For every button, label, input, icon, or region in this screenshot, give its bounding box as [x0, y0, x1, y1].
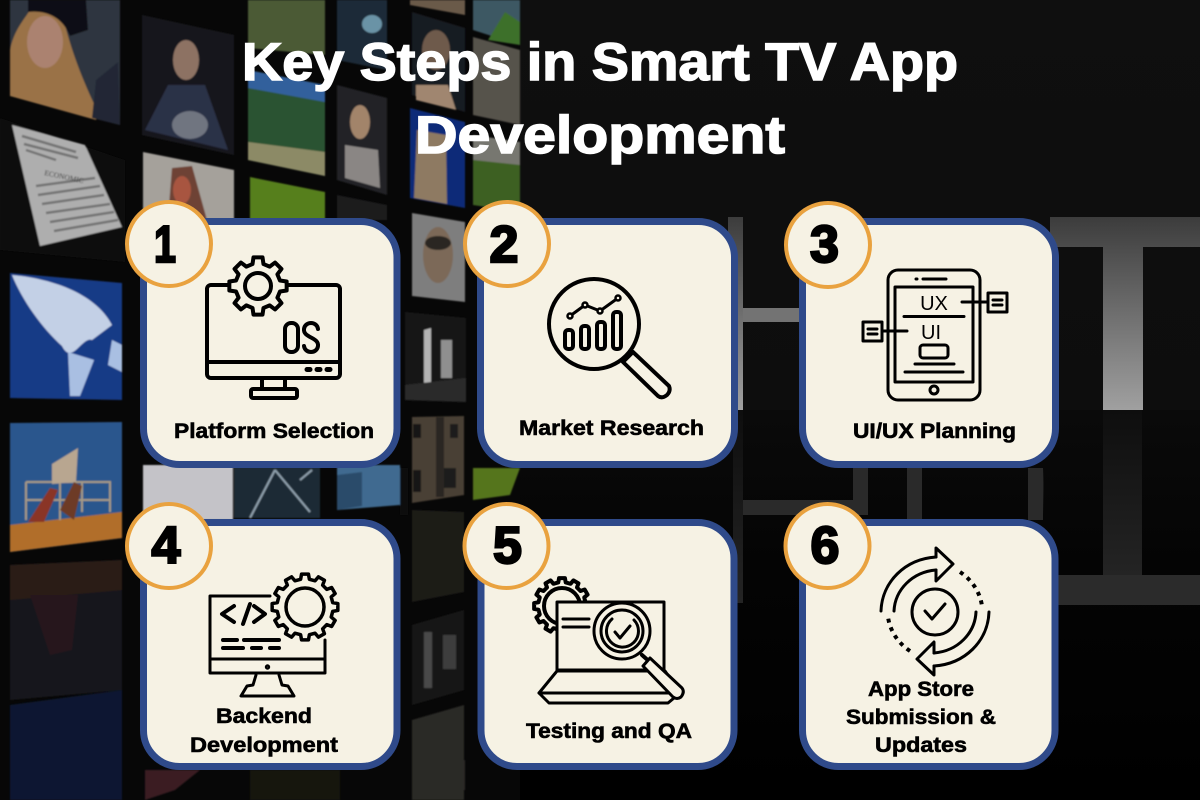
panel: step 3 ui/ux planning	[786, 203, 1056, 464]
glasses girl	[412, 213, 465, 302]
number badge 4	[127, 504, 211, 588]
icon: magnifier with bar chart	[549, 279, 670, 397]
door screen	[405, 312, 466, 402]
background: giant reflected letters	[728, 217, 1200, 605]
icon: phone wireframe	[863, 270, 1007, 400]
number badge 4: 4	[152, 517, 181, 575]
panel: step 1 platform selection	[127, 202, 397, 464]
strip bottom	[145, 770, 200, 800]
castle	[412, 416, 464, 503]
woman with hat	[10, 0, 120, 125]
world map screen	[10, 273, 122, 400]
column 6 top	[473, 0, 520, 45]
tablet page with economic text	[0, 118, 125, 262]
icon: monitor with gear and OS	[207, 257, 340, 398]
icon: laptop with magnifier and gear	[534, 578, 683, 703]
playground screen	[10, 422, 122, 552]
reflected column 5	[412, 510, 464, 602]
number badge 1: 1	[154, 216, 176, 274]
title: Key Steps in Smart TV App	[242, 33, 958, 92]
label: Platform Selection	[174, 420, 374, 443]
label: App Store	[868, 678, 974, 701]
dark screens	[337, 0, 387, 70]
number badge 6: 6	[811, 517, 839, 575]
number badge 3: 3	[810, 216, 839, 274]
panel: step 6 app store submission and updates	[786, 504, 1055, 766]
label	[190, 705, 338, 757]
number badge 1	[127, 202, 211, 286]
label: Backend	[216, 705, 312, 728]
label	[846, 678, 996, 757]
title: Development	[415, 106, 785, 165]
label: Submission &	[846, 706, 996, 729]
label: Development	[190, 734, 338, 757]
woman top column 5	[410, 0, 465, 15]
label: UI/UX Planning	[853, 420, 1016, 443]
icon: circular update arrows with check	[881, 548, 989, 675]
icon: phone wireframe: UX	[920, 293, 948, 315]
reflected screens column 1	[10, 560, 122, 700]
panel: step 2 market research	[465, 202, 734, 464]
pinup	[143, 152, 234, 220]
label: Updates	[875, 734, 967, 757]
number badge 6	[786, 504, 870, 588]
number badge 5	[464, 504, 548, 588]
label: Testing and QA	[526, 720, 692, 743]
panel: step 4 backend development	[127, 504, 397, 766]
man	[142, 15, 234, 155]
icon: phone wireframe: UI	[921, 322, 941, 344]
number badge 2	[465, 202, 549, 286]
label: Market Research	[519, 417, 704, 440]
strip under row 1	[143, 465, 233, 520]
icon: code monitor with gear	[210, 574, 338, 696]
panel: step 5 testing and qa	[464, 504, 734, 766]
number badge 2: 2	[490, 216, 518, 274]
number badge 5: 5	[493, 517, 522, 575]
forest	[248, 0, 325, 55]
field bottom strip	[473, 468, 520, 500]
background: dark studio with video wall: ECONOMIC	[44, 168, 85, 185]
blue screen with girl	[410, 108, 465, 208]
number badge 3	[786, 203, 870, 287]
title	[242, 33, 958, 165]
